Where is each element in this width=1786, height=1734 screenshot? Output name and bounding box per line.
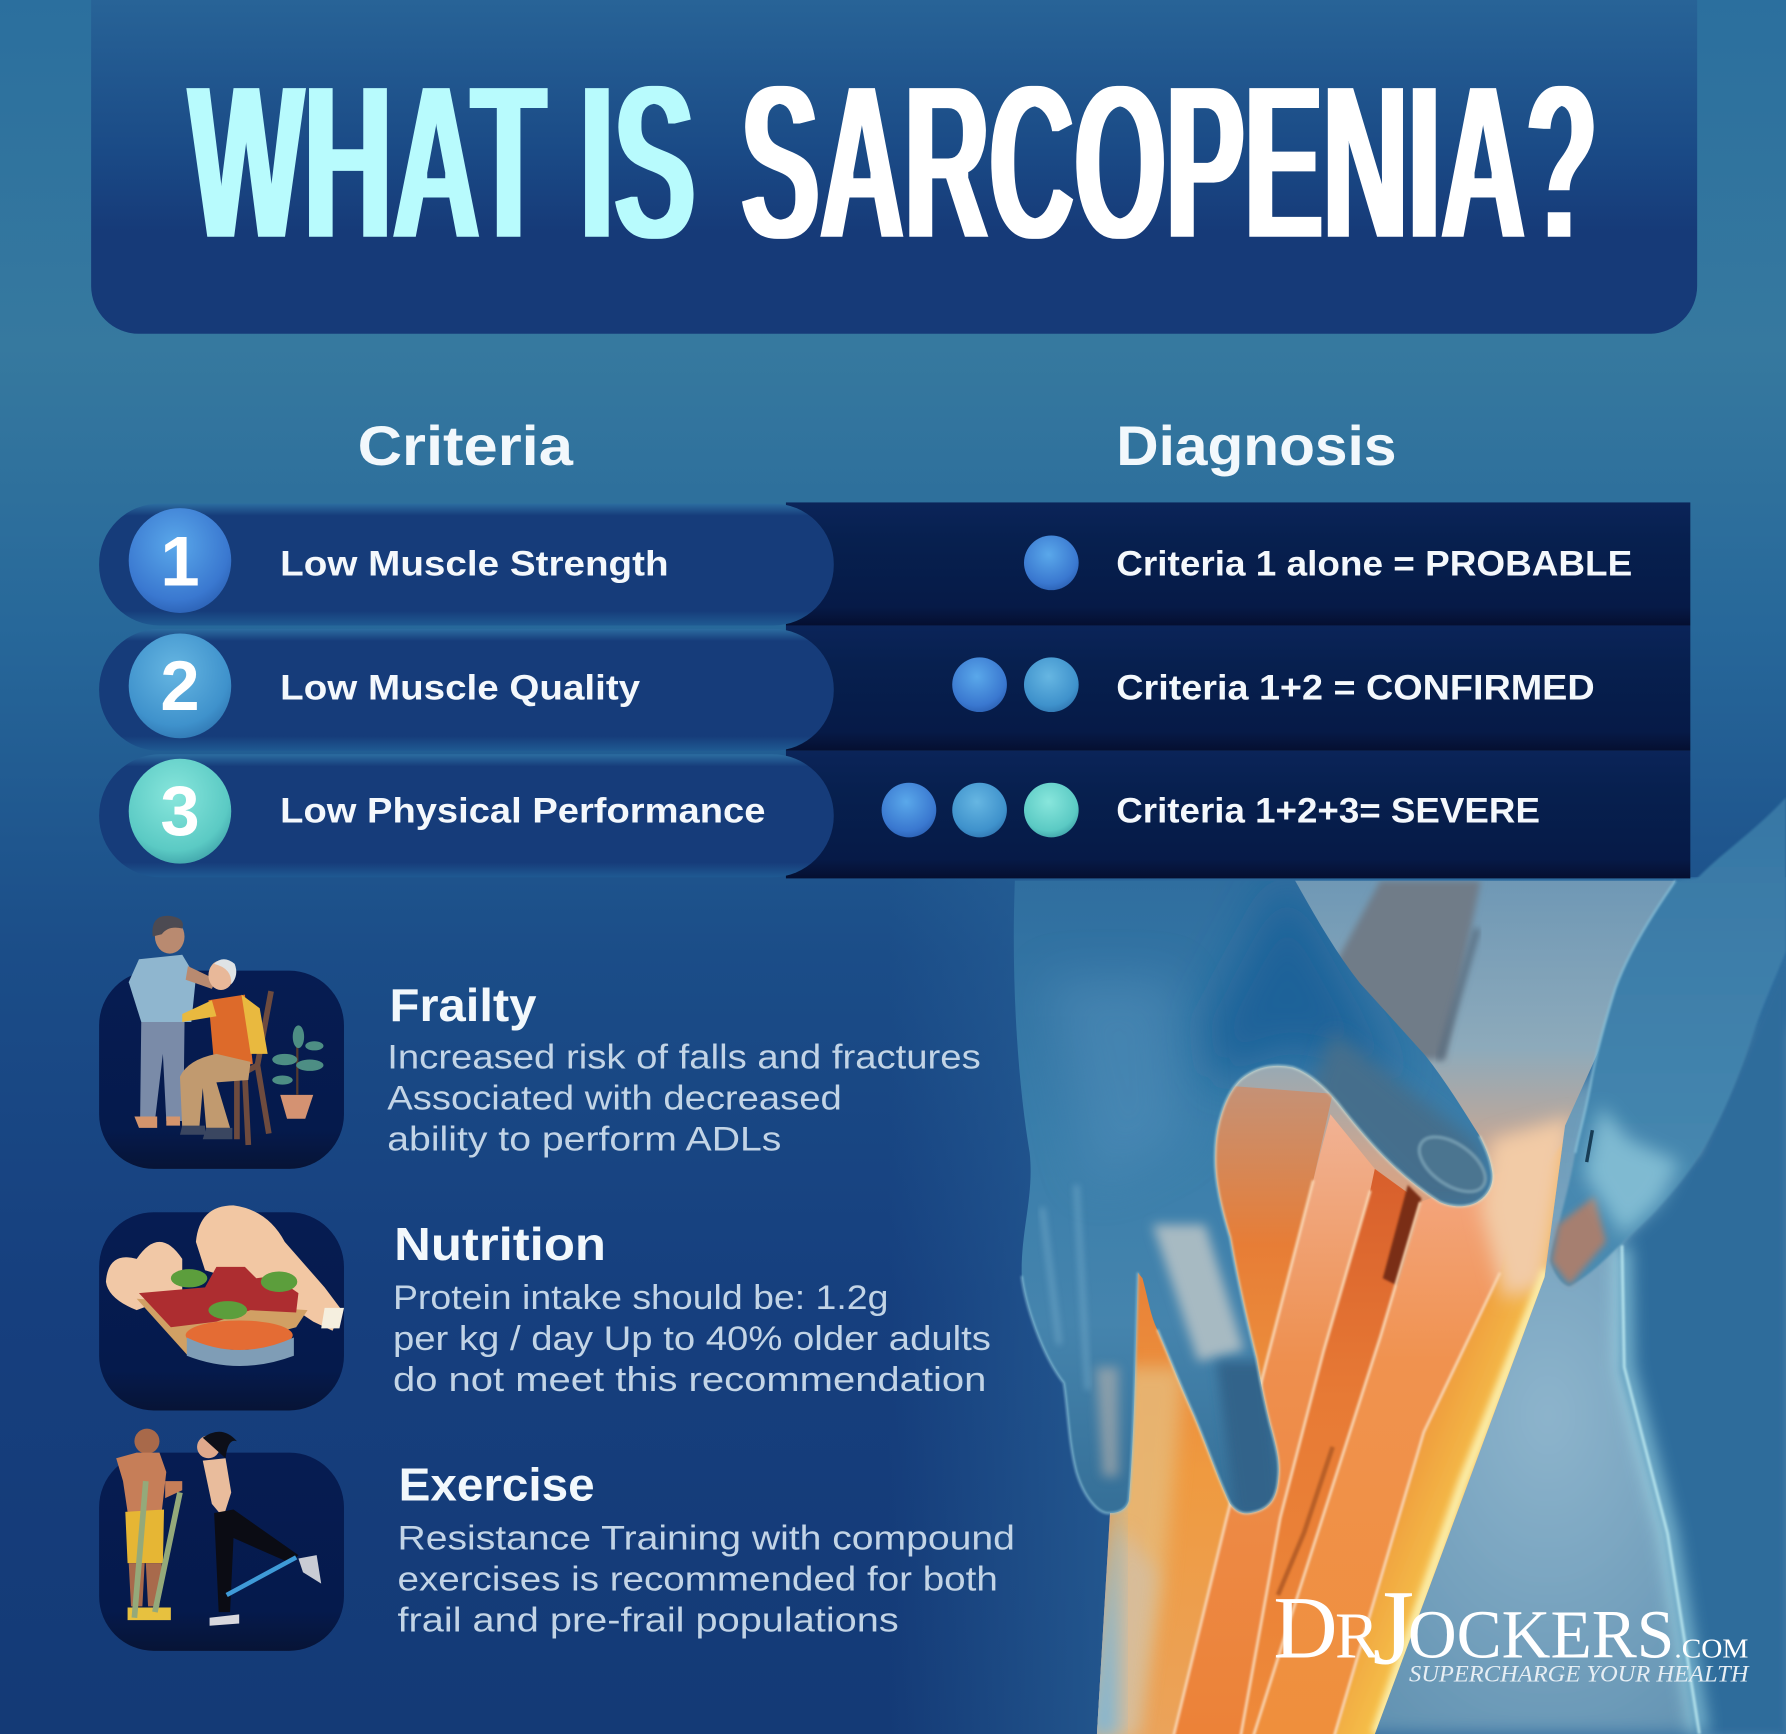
exercise text block: Exercise	[399, 1458, 595, 1510]
nutrition text block: Protein intake should be: 1.2g	[393, 1279, 888, 1317]
nutrition text block: do not meet this recommendation	[393, 1361, 986, 1399]
row 1	[99, 504, 1632, 625]
icon: protein foods	[99, 1205, 344, 1410]
woman	[197, 1436, 220, 1458]
gap between the legs	[1310, 1025, 1786, 1734]
deep orange band	[1240, 1169, 1420, 1734]
senior	[208, 960, 234, 990]
badge 2: 2	[160, 646, 200, 725]
peach band	[1173, 1114, 1375, 1734]
badge 3: 3	[160, 771, 200, 850]
criterion label: Low Muscle Strength	[280, 544, 669, 583]
diagnosis text: Criteria 1+2 = CONFIRMED	[1116, 669, 1595, 708]
badge 2	[129, 633, 231, 738]
logo: DrJockers.com: SUPERCHARGE YOUR HEALTH	[1409, 1662, 1750, 1687]
heading: diagnosis: Diagnosis	[1116, 414, 1396, 477]
exercise text block: frail and pre-frail populations	[398, 1601, 899, 1639]
criterion label: Low Physical Performance	[280, 792, 765, 831]
right orange band	[1254, 1198, 1486, 1734]
row 3	[99, 754, 1540, 877]
yellow band	[1334, 1139, 1565, 1734]
header panel	[91, 0, 1697, 334]
icon: resistance exercise	[99, 1429, 344, 1651]
near hand	[1014, 877, 1495, 1515]
diagnosis bands	[786, 502, 1690, 878]
muscled leg	[1082, 877, 1697, 1734]
frailty text block: Frailty	[390, 979, 537, 1031]
nutrition text block: Nutrition	[394, 1218, 606, 1270]
diagnosis dot	[1024, 535, 1079, 590]
pale outer edge glow	[1376, 1270, 1547, 1734]
pale left band	[1096, 1367, 1185, 1734]
title	[189, 38, 1597, 287]
badge 3	[129, 759, 231, 864]
badge 1	[129, 508, 231, 613]
plant	[280, 1095, 313, 1119]
diagnosis dots	[952, 657, 1079, 712]
logo: DrJockers.com	[1273, 1569, 1750, 1687]
diagnosis text: Criteria 1+2+3= SEVERE	[1116, 792, 1540, 831]
exercise text block: exercises is recommended for both	[398, 1560, 998, 1598]
dark crease	[1383, 1185, 1422, 1285]
tendon lines	[1173, 1180, 1500, 1734]
diagnosis dots	[882, 783, 1079, 837]
grey upper muscle	[1333, 881, 1481, 1060]
icon: caregiver and senior	[99, 916, 344, 1169]
frailty text block	[387, 979, 981, 1159]
logo: DrJockers.com: OCKERS	[1408, 1597, 1674, 1673]
man	[134, 1429, 159, 1454]
row 2	[99, 629, 1595, 751]
chair	[237, 991, 271, 1145]
criterion label: Low Muscle Quality	[280, 669, 641, 708]
far leg	[1620, 957, 1786, 1734]
caregiver	[155, 919, 185, 954]
pale upper patch	[1481, 1117, 1572, 1299]
title: WHAT IS	[189, 38, 695, 287]
frailty text block: Associated with decreased	[387, 1080, 842, 1118]
logo: DrJockers.com: D	[1273, 1580, 1338, 1678]
left muscle	[1098, 1082, 1333, 1734]
nutrition text block	[393, 1218, 991, 1399]
diagnosis text: Criteria 1 alone = PROBABLE	[1116, 544, 1632, 583]
exercise text block	[398, 1458, 1015, 1639]
frailty text block: Increased risk of falls and fractures	[387, 1039, 981, 1077]
badge 1: 1	[160, 522, 200, 601]
far hand	[1550, 798, 1786, 1286]
thumbnail	[1410, 1126, 1495, 1203]
heading: criteria: Criteria	[358, 414, 574, 477]
pill	[99, 504, 834, 625]
nutrition text block: per kg / day Up to 40% older adults	[393, 1320, 991, 1358]
logo: DrJockers.com: .COM	[1674, 1634, 1748, 1664]
logo: DrJockers.com: R	[1335, 1600, 1379, 1673]
pill	[99, 629, 834, 751]
logo: DrJockers.com: J	[1373, 1569, 1414, 1687]
pill	[99, 754, 834, 877]
exercise text block: Resistance Training with compound	[398, 1519, 1015, 1557]
frailty text block: ability to perform ADLs	[387, 1121, 781, 1159]
illustration: knee with glowing muscle and hands	[1014, 798, 1786, 1734]
